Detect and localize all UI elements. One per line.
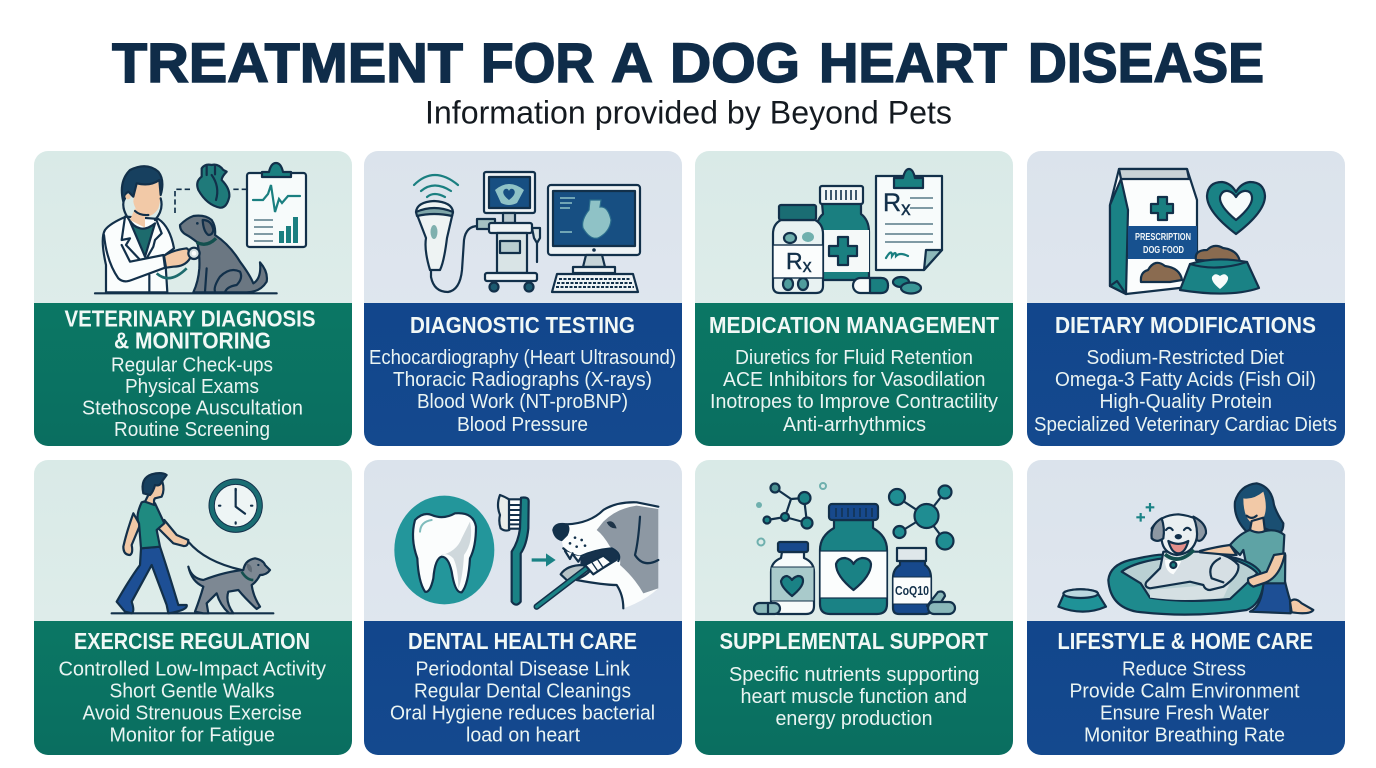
panel: dental health care <box>364 460 682 755</box>
list: Regular Dental Cleanings <box>414 680 631 702</box>
icon: prescription dog food, heart and bowl <box>1110 169 1265 294</box>
icon: ultrasound probe, cart and monitor <box>414 172 640 292</box>
list: Diuretics for Fluid Retention <box>735 347 973 369</box>
heading line 2: & MONITORING <box>114 328 271 354</box>
icon: pill bottles and prescription: x <box>901 199 911 220</box>
icon: tooth, toothbrush and dog teeth brushing <box>394 495 658 608</box>
icon: man walking dog with clock <box>112 473 273 613</box>
list: Controlled Low-Impact Activity <box>58 658 326 680</box>
list <box>82 354 303 441</box>
icon: prescription dog food, heart and bowl: DOG FOOD <box>1143 244 1184 256</box>
heading: DENTAL HEALTH CARE <box>408 628 637 654</box>
list: Thoracic Radiographs (X-rays) <box>393 369 652 391</box>
body text: energy production <box>776 708 932 730</box>
body text: Specific nutrients supporting <box>729 664 980 686</box>
body text: heart muscle function and <box>740 686 967 708</box>
title: TREATMENT <box>112 31 463 94</box>
title: FOR <box>481 31 594 94</box>
list: Ensure Fresh Water <box>1100 702 1269 724</box>
list: Echocardiography (Heart Ultrasound) <box>369 347 676 369</box>
panel: exercise regulation <box>34 460 352 755</box>
list: Blood Pressure <box>457 414 588 436</box>
heading: MEDICATION MANAGEMENT <box>709 312 999 338</box>
icon: woman petting dog on bed with water bowl <box>1058 483 1313 615</box>
icon: vet examining dog with heart and chart <box>95 163 306 293</box>
panel: lifestyle and home care <box>1027 460 1345 755</box>
list <box>1034 347 1337 436</box>
icon: pill bottles and prescription: R <box>883 189 901 217</box>
title: DOG <box>670 31 800 94</box>
list <box>1070 658 1300 746</box>
list: Avoid Strenuous Exercise <box>82 702 302 724</box>
list: High-Quality Protein <box>1100 391 1272 413</box>
list: Sodium-Restricted Diet <box>1086 347 1284 369</box>
subtitle: Information provided by Beyond Pets <box>425 94 952 130</box>
panel: veterinary diagnosis and monitoring <box>34 151 352 446</box>
icon: supplement bottles and molecules <box>754 483 955 614</box>
list <box>390 658 655 746</box>
icon: prescription dog food, heart and bowl: PRESCRIPTION <box>1135 231 1191 243</box>
title: DISEASE <box>1028 31 1264 94</box>
panel: diagnostic testing <box>364 151 682 446</box>
list: ACE Inhibitors for Vasodilation <box>723 369 986 391</box>
icon: pill bottles and prescription: R <box>786 248 803 274</box>
list: load on heart <box>466 724 580 746</box>
list: Monitor for Fatigue <box>110 724 275 746</box>
list <box>369 347 676 436</box>
icon: pill bottles and prescription <box>773 169 942 294</box>
list <box>58 658 326 746</box>
list: Periodontal Disease Link <box>416 658 631 680</box>
list: Specialized Veterinary Cardiac Diets <box>1034 414 1337 436</box>
list: Inotropes to Improve Contractility <box>710 391 998 413</box>
heading: VETERINARY DIAGNOSIS <box>64 306 316 332</box>
list: Oral Hygiene reduces bacterial <box>390 702 655 724</box>
list: Monitor Breathing Rate <box>1084 724 1285 746</box>
list: Stethoscope Auscultation <box>82 398 303 420</box>
heading: LIFESTYLE & HOME CARE <box>1058 628 1313 654</box>
list: Blood Work (NT-proBNP) <box>417 391 628 413</box>
list: Physical Exams <box>125 376 259 398</box>
list: Routine Screening <box>114 419 270 441</box>
heading: DIAGNOSTIC TESTING <box>410 312 635 338</box>
heading: DIETARY MODIFICATIONS <box>1055 312 1316 338</box>
list: Reduce Stress <box>1122 658 1246 680</box>
list: Regular Check-ups <box>111 354 273 376</box>
icon: supplement bottles and molecules: CoQ10 <box>895 583 929 598</box>
icon: pill bottles and prescription: x <box>803 256 812 276</box>
panel: medication management <box>695 151 1013 446</box>
list: Provide Calm Environment <box>1070 680 1300 702</box>
title: A <box>611 31 653 94</box>
panel: supplemental support <box>695 460 1013 755</box>
body text <box>729 664 980 730</box>
list <box>710 347 998 436</box>
list: Anti-arrhythmics <box>783 414 926 436</box>
heading: EXERCISE REGULATION <box>74 628 310 654</box>
panel: dietary modifications <box>1027 151 1345 446</box>
heading: SUPPLEMENTAL SUPPORT <box>720 628 988 654</box>
title <box>112 31 1264 94</box>
list: Short Gentle Walks <box>110 680 274 702</box>
title: HEART <box>819 31 1007 94</box>
list: Omega-3 Fatty Acids (Fish Oil) <box>1055 369 1316 391</box>
